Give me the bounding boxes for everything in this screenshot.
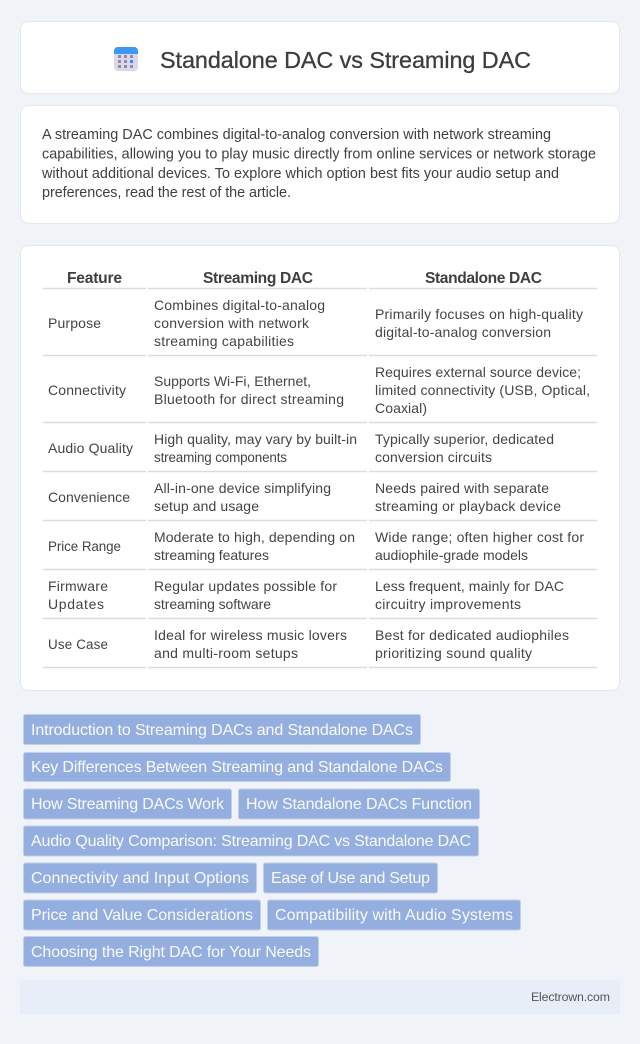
tag: audio quality (24, 826, 478, 856)
row: connectivity: limited connectivity (USB, Optical, (375, 382, 590, 398)
tag: connectivity (24, 863, 256, 893)
table header: Feature (67, 270, 122, 287)
row: audio quality: High quality, may vary by built-in (154, 431, 357, 447)
row: convenience: setup and usage (154, 498, 259, 514)
footer: Electrown.com (531, 990, 610, 1004)
tag: choosing: Choosing the Right DAC for Your Needs (31, 944, 311, 961)
tag: ease of use: Ease of Use and Setup (271, 870, 430, 887)
table header: Standalone DAC (425, 270, 542, 287)
icon: calendar (114, 47, 138, 71)
tag: key differences: Key Differences Between Streaming and Standalone DACs (31, 759, 443, 776)
tag: how standalone works (238, 789, 480, 819)
tag: ease of use (264, 863, 438, 893)
row: price range: streaming features (154, 547, 269, 563)
row: use case: prioritizing sound quality (375, 645, 532, 661)
row: price range: audiophile-grade models (375, 547, 528, 563)
tag: compatibility: Compatibility with Audio Systems (275, 907, 513, 924)
row: convenience: All-in-one device simplifying (154, 480, 331, 496)
row: firmware updates: Updates (48, 596, 104, 612)
row: audio quality: conversion circuits (375, 449, 492, 465)
row: firmware updates (48, 578, 564, 612)
table header: Streaming DAC (203, 270, 313, 287)
row: firmware updates: Less frequent, mainly for DAC (375, 578, 564, 594)
tag: audio quality: Audio Quality Comparison: Streaming DAC vs Standalone DAC (31, 833, 471, 850)
row: convenience: streaming or playback device (375, 498, 561, 514)
row: firmware updates: Regular updates possible for (154, 578, 337, 594)
row: use case (48, 627, 569, 661)
row: use case: and multi-room setups (154, 645, 298, 661)
tag: key differences (24, 752, 450, 782)
row: price range: Price Range (48, 539, 121, 554)
row: purpose: conversion with network (154, 315, 310, 331)
row: audio quality: Typically superior, dedicated (375, 431, 554, 447)
row: connectivity: Coaxial) (375, 400, 427, 416)
title: Standalone DAC vs Streaming DAC (160, 47, 531, 73)
tag: connectivity: Connectivity and Input Options (31, 870, 249, 887)
row: convenience: Needs paired with separate (375, 480, 549, 496)
row: firmware updates: Firmware (48, 578, 108, 594)
panel: header (20, 22, 620, 94)
table header (67, 270, 542, 287)
row: connectivity (48, 364, 590, 416)
intro text: capabilities, allowing you to play music directly from online services or network storage (42, 146, 596, 162)
row: purpose: Combines digital-to-analog (154, 297, 325, 313)
row: audio quality (48, 431, 554, 465)
intro text: preferences, read the rest of the article. (42, 185, 291, 201)
row: connectivity: Connectivity (48, 382, 126, 398)
topic tags (24, 714, 520, 966)
row: convenience (48, 480, 561, 514)
intro text: without additional devices. To explore which option best fits your audio setup and (41, 166, 559, 182)
panel: intro (20, 106, 620, 224)
row: purpose: Primarily focuses on high-quality (375, 306, 583, 322)
row: price range: Wide range; often higher cost for (375, 529, 584, 545)
row: purpose (48, 297, 583, 349)
row: connectivity: Bluetooth for direct streaming (154, 391, 344, 407)
row: firmware updates: streaming software (154, 596, 271, 612)
row: use case: Best for dedicated audiophiles (375, 627, 569, 643)
tag: introduction (24, 714, 420, 744)
row: purpose: streaming capabilities (154, 333, 294, 349)
tag: compatibility (268, 900, 520, 930)
tag: choosing (24, 936, 318, 966)
intro text: A streaming DAC combines digital-to-analog conversion with network streaming (42, 127, 551, 143)
tag: how streaming works: How Streaming DACs Work (31, 796, 225, 813)
row: firmware updates: circuitry improvements (375, 596, 521, 612)
row: purpose: Purpose (48, 315, 101, 331)
row: use case: Ideal for wireless music lovers (154, 627, 347, 643)
row: connectivity: Requires external source device; (375, 364, 581, 380)
row: audio quality: streaming components (154, 450, 287, 465)
row: price range (48, 529, 584, 563)
tag: how standalone works: How Standalone DACs Function (246, 796, 472, 813)
footer (20, 980, 620, 1014)
row: purpose: digital-to-analog conversion (375, 324, 551, 340)
row: convenience: Convenience (48, 489, 130, 505)
row: connectivity: Supports Wi-Fi, Ethernet, (154, 373, 311, 389)
row: use case: Use Case (48, 637, 108, 652)
tag: how streaming works (24, 789, 232, 819)
panel: comparison table (20, 246, 620, 690)
tag: introduction: Introduction to Streaming DACs and Standalone DACs (31, 722, 413, 739)
row: audio quality: Audio Quality (48, 440, 133, 456)
row: price range: Moderate to high, depending on (154, 529, 355, 545)
tag: price (24, 900, 260, 930)
tag: price: Price and Value Considerations (31, 907, 253, 924)
